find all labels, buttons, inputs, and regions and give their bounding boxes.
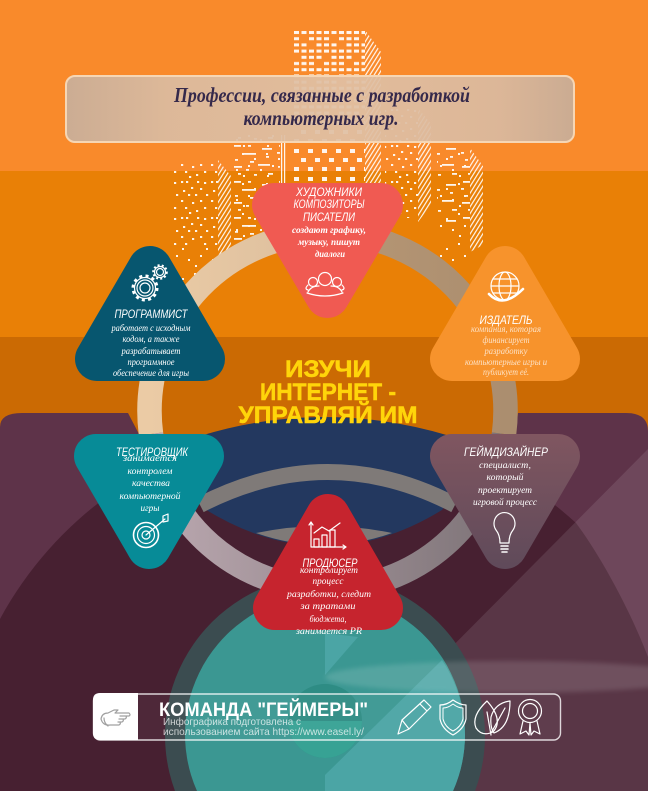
panel: publisher: ИЗДАТЕЛЬ [480,313,533,327]
panel: game designer: игровой процесс [473,497,538,508]
title panel: Профессии, связанные с разработкой [173,83,470,107]
panel: publisher: разработку [484,346,528,357]
panel: tester: компьютерной [120,491,181,502]
panel: producer: контролирует [300,566,358,576]
panel: tester: занимается [122,454,177,464]
panel: publisher [452,268,558,378]
panel: tester [96,445,202,548]
panel: artists: создают графику, [292,225,366,236]
panel: publisher: финансирует [482,335,530,346]
panel: artists: ХУДОЖНИКИ [295,185,362,199]
panel: game designer: проектирует [478,486,532,496]
panel: publisher: публикует её. [483,367,529,378]
title panel: компьютерных игр. [244,106,398,130]
panel: producer: ПРОДЮСЕР [302,556,358,570]
center slogan: УПРАВЛЯЙ ИМ [238,401,418,429]
footer bar: Инфографика подготовлена с [163,716,301,728]
footer bar [93,693,560,740]
panel: tester: качества [132,479,170,489]
footer bar: использованием сайта https://www.easel.ly/ [163,726,364,738]
main ring [150,233,506,589]
center slogan [238,356,418,429]
panel: artists: ПИСАТЕЛИ [303,210,355,224]
icon: chart [309,522,346,549]
diagonal light overlay [309,449,648,791]
footer bar: КОМАНДА "ГЕЙМЕРЫ" [159,699,368,721]
panel: programmer: разрабатывает [121,346,181,357]
panel: game designer [452,443,558,552]
panel: producer: занимается PR [295,627,362,637]
panel: producer [275,516,381,637]
icon: light bulb [494,513,515,552]
dark purple backdrop [0,413,648,791]
panel: producer: процесс [312,577,344,587]
dark maroon circle [0,425,648,791]
teal circle [165,575,485,791]
panel: tester: контролем [128,467,172,477]
icon: globe [489,272,523,300]
panel: programmer: ПРОГРАММИСТ [114,307,189,321]
navy lens [180,417,472,546]
panel: programmer: кодом, а также [122,334,180,345]
panel: producer: за тратами [299,602,356,612]
center slogan: ИЗУЧИ [285,356,371,383]
panel: publisher: компания, которая [471,325,541,335]
panel: programmer: работает с исходным [111,323,190,334]
panel: game designer: ГЕЙМДИЗАЙНЕР [464,443,548,459]
icon: pencil [398,700,431,734]
panel: programmer: программное [128,358,174,368]
panel: producer: бюджета, [310,614,346,625]
icon: medal [518,700,542,735]
grey inner arc [200,472,455,505]
panel: programmer: обеспечение для игры [113,368,189,379]
city skyline [173,30,483,287]
icon: target [134,514,168,548]
panel: programmer [97,265,203,379]
icon: leaves [475,701,510,735]
panel: artists: диалоги [315,249,345,260]
panel: game designer: который [486,472,524,483]
panel: artists: музыку, пишут [297,238,360,248]
panel: artists: КОМПОЗИТОРЫ [294,197,365,211]
icon: shield [440,700,466,735]
panel: artists [274,185,381,296]
panel: tester: игры [140,504,160,514]
panel: tester: ТЕСТИРОВЩИК [116,445,189,459]
icon: gears [133,265,167,300]
title panel [66,76,574,142]
panel: producer: разработки, следит [286,589,371,600]
icon: people [306,272,344,296]
panel: game designer: специалист, [479,461,531,471]
icon: pointing hand [101,710,130,726]
center slogan: ИНТЕРНЕТ - [260,379,396,406]
smear shadow [325,661,648,693]
panel: publisher: компьютерные игры и [465,358,547,368]
grey inner lens [256,526,392,545]
